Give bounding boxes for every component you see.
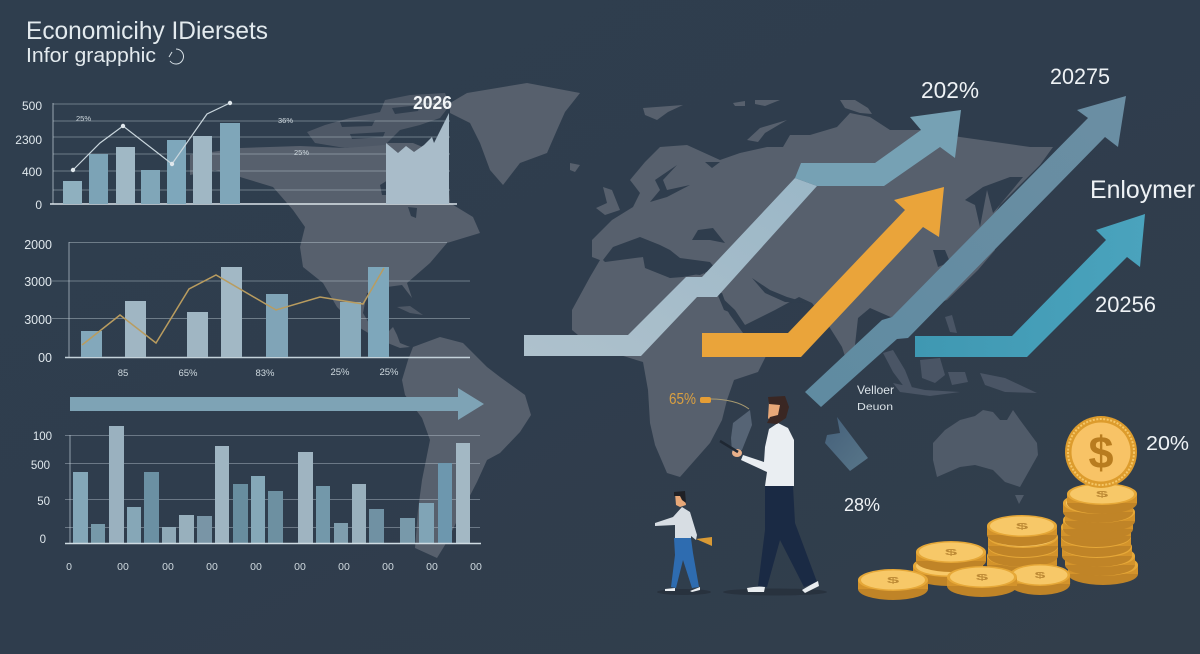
map: Cuba: [397, 306, 423, 315]
label: 20256: 20256: [1095, 292, 1156, 317]
x axis labels: 00: [338, 561, 350, 573]
y axis labels: 100: [33, 431, 52, 443]
label: 2026: 2026: [413, 93, 452, 113]
line series: [71, 101, 232, 172]
callout: 65%: [669, 391, 749, 409]
x axis labels: 00: [250, 561, 262, 573]
shadow: [723, 588, 827, 596]
bars: [81, 267, 389, 357]
coin: left flat: [858, 569, 928, 600]
hair and beard: [767, 396, 789, 424]
axis labels: 500: [22, 99, 42, 113]
map: Iceland and UK: [570, 163, 620, 215]
label: 20275: 20275: [1050, 64, 1110, 89]
y axis labels: 0: [40, 534, 46, 546]
map: inland seas and bays: [380, 162, 1023, 312]
shirt: [741, 423, 794, 486]
arrow: horizontal blue: [70, 388, 484, 420]
coin: right flat: [1010, 564, 1070, 595]
percentage labels: 85: [118, 368, 128, 379]
chart: top combination chart: [15, 93, 457, 212]
arrow tail fragment: [825, 417, 868, 471]
x axis labels: 00: [294, 561, 306, 573]
coin: large dollar coin: [1065, 416, 1137, 488]
line series: [82, 268, 384, 345]
x axis labels: 00: [426, 561, 438, 573]
label: Velloer Deuon: [857, 383, 894, 413]
person: adult with tablet: [720, 396, 827, 596]
icon: small circular arrow: [169, 49, 184, 64]
label: 28%: 28%: [844, 494, 880, 515]
stack: middle stack: [987, 515, 1058, 576]
chart: middle combination chart: [24, 238, 470, 379]
x axis labels: 0: [66, 561, 72, 573]
shoes: [665, 587, 700, 592]
coin: middle flat: [947, 566, 1017, 597]
map: Africa: [572, 257, 770, 477]
coin: right flat: $: [1035, 572, 1045, 580]
label: Enloymer: Enloymer: [1090, 176, 1195, 204]
gridlines: [53, 104, 450, 190]
map: North America: [190, 143, 480, 348]
stack: left pair: [913, 541, 986, 586]
map: Canadian Arctic islands: [307, 93, 450, 148]
axis labels: 0: [35, 198, 42, 212]
face: [768, 402, 783, 423]
axis labels: [15, 99, 42, 212]
stack: right tall stack: [1061, 483, 1138, 585]
shoes: [747, 581, 819, 593]
coin: left flat: $: [887, 575, 900, 585]
bars: [63, 123, 240, 204]
y axis labels: 50: [37, 496, 50, 508]
callout: 65%: 65%: [669, 391, 696, 408]
x axis labels: 00: [206, 561, 218, 573]
percentage labels: 36%: [278, 116, 293, 125]
arrow: slate diagonal: [805, 96, 1126, 407]
map: Eurasia: [592, 113, 1053, 372]
shadow: [657, 589, 711, 595]
head: [675, 493, 686, 507]
axis labels: [24, 238, 52, 365]
stack: right tall stack: $: [1096, 489, 1109, 499]
area shape: [386, 113, 449, 204]
bars: [73, 426, 470, 543]
percentage labels: [118, 367, 399, 379]
subtitle: Infor grapphic: [26, 45, 156, 67]
labels on arrows: [921, 64, 1195, 317]
label: Velloer Deuon: Velloer: [857, 383, 894, 397]
axis labels: 00: [38, 351, 52, 365]
x axis labels: 00: [117, 561, 129, 573]
axis labels: 3000: [24, 275, 52, 289]
percentage labels: 83%: [255, 368, 275, 379]
broom: [696, 537, 712, 546]
gridlines: [52, 242, 470, 318]
tablet: [720, 441, 738, 452]
chart: bottom bar chart: [31, 426, 482, 573]
coin: middle flat: $: [976, 572, 989, 582]
y axis labels: [31, 431, 52, 546]
person: child with broom: [655, 491, 712, 595]
arrow: teal: [915, 214, 1145, 357]
world map: [190, 83, 1053, 558]
x axis labels: 00: [162, 561, 174, 573]
map: Arctic islands: [643, 100, 872, 142]
gridlines: [65, 436, 480, 528]
label: 20%: 20%: [1146, 433, 1189, 455]
percentage labels: 25%: [76, 114, 91, 123]
title line: Economicihy IDiersets: [26, 17, 268, 45]
x axis labels: 00: [382, 561, 394, 573]
x axis labels: 00: [470, 561, 482, 573]
map: Greenland: [450, 83, 580, 185]
axis labels: 400: [22, 165, 42, 179]
percentage labels: [76, 114, 309, 157]
arrow lower section: [524, 178, 817, 356]
map: South America: [402, 337, 531, 558]
y axis labels: 500: [31, 460, 50, 472]
percentage labels: 25%: [379, 367, 399, 378]
trousers: [758, 486, 817, 587]
arrow: orange: [702, 187, 944, 357]
trousers: [671, 538, 699, 588]
percentage labels: 65%: [178, 368, 198, 379]
x axis labels: [66, 561, 482, 573]
stack: middle stack: $: [1016, 521, 1029, 531]
shirt: [655, 507, 697, 540]
axis labels: 3000: [24, 313, 52, 327]
axis labels: 2300: [15, 133, 42, 147]
percentage labels: 25%: [330, 367, 350, 378]
axis labels: 2000: [24, 238, 52, 252]
percentage labels: 25%: [294, 148, 309, 157]
map: Australia: [933, 410, 1038, 504]
label: 202%: 202%: [921, 77, 979, 103]
label: Velloer Deuon: Deuon: [857, 402, 893, 413]
hand: [732, 449, 742, 457]
coin stacks: [858, 416, 1138, 600]
arrow: light blue stepped: [524, 110, 961, 356]
title: [26, 17, 268, 67]
map: arctic channels: [340, 105, 420, 139]
arrow upper section: [795, 110, 961, 186]
stack: left pair: $: [945, 547, 958, 557]
map: Madagascar: [731, 410, 752, 452]
coin: large dollar coin: $: [1088, 427, 1114, 478]
map: Southeast Asia islands: [883, 315, 1037, 396]
